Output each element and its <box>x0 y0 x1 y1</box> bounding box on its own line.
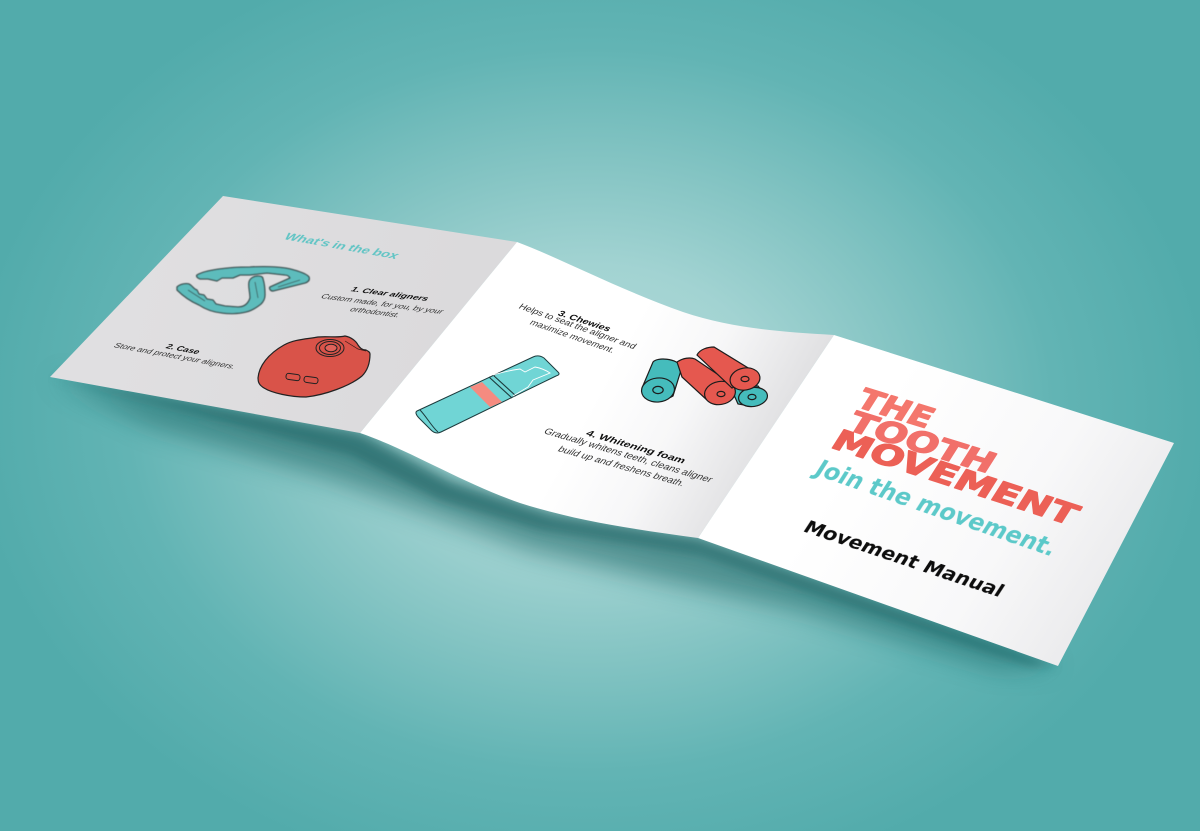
heading: what's in the box: What's in the box <box>281 231 403 261</box>
text: item 1 clear aligners: orthodontist. <box>347 306 402 319</box>
text: item 4 whitening foam: Gradually whitens teeth, cleans aligner <box>541 427 715 485</box>
logo: the tooth movement <box>825 383 1085 532</box>
lower aligner arch <box>177 276 265 314</box>
icon: aligner case <box>258 336 370 397</box>
teal rear roll <box>730 386 769 408</box>
tagline: join the movement: Join the movement. <box>808 455 1063 562</box>
lower aligner inner ridge <box>188 282 258 301</box>
panel: middle inner page <box>360 242 834 538</box>
icon: whitening foam bottle <box>416 356 559 433</box>
text: item 1 clear aligners: Custom made, for you, by your <box>318 293 446 316</box>
panel: right cover page <box>698 335 1174 666</box>
cast shadow under brochure <box>50 377 1058 668</box>
text: item 2 case: Store and protect your aligners. <box>111 342 238 371</box>
text: item 4 whitening foam: 4. Whitening foam <box>583 429 688 466</box>
logo: the tooth movement: TOOTH <box>841 406 1003 480</box>
text: item 4 whitening foam: build up and freshens breath. <box>555 445 687 488</box>
panel: left inner page <box>50 196 517 433</box>
icon: clear aligners <box>177 267 309 314</box>
icon: chewies rolls <box>640 347 769 408</box>
text: item 2 case: 2. Case <box>163 343 202 356</box>
subtitle: movement manual: Movement Manual <box>799 517 1009 601</box>
text: item 3 chewies: maximize movement. <box>527 318 617 355</box>
text: item 1 clear aligners: 1. Clear aligners <box>348 286 431 303</box>
text: item 3 chewies: Helps to seat the aligner and <box>516 302 638 351</box>
red middle roll <box>677 358 737 407</box>
text: item 3 chewies: 3. Chewies <box>555 309 614 334</box>
upper aligner inner ridge <box>278 280 300 287</box>
logo: the tooth movement: THE <box>850 383 941 435</box>
upper aligner arch <box>197 267 309 291</box>
red top roll <box>697 347 762 392</box>
teal left roll <box>640 359 682 404</box>
logo: the tooth movement: MOVEMENT <box>825 424 1085 532</box>
text: item 1 clear aligners <box>318 286 446 319</box>
